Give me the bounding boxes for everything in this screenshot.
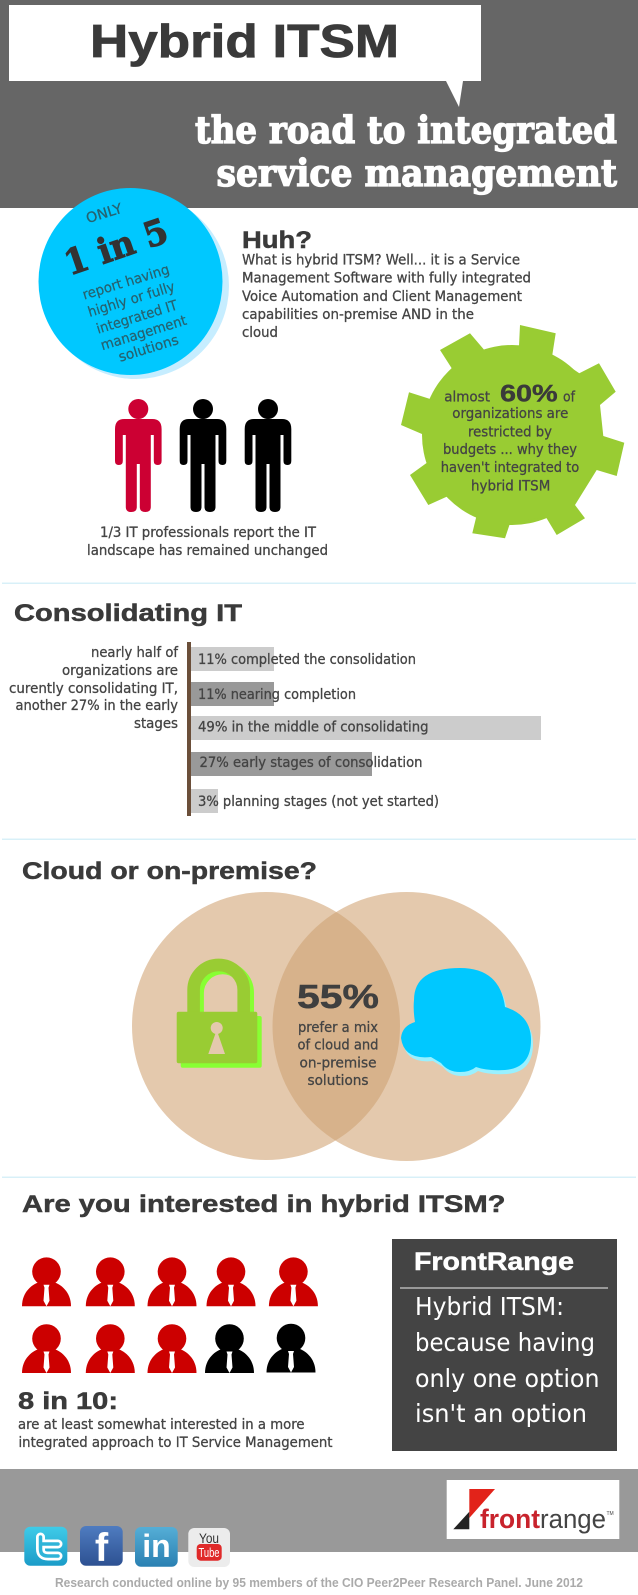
icon: red person — [115, 399, 162, 512]
icon: padlock — [177, 965, 262, 1068]
callout: almost 60%: hybrid ITSM — [471, 479, 550, 495]
1 in 5 text: integrated IT — [95, 298, 180, 338]
icon: red person 4 — [206, 1257, 256, 1306]
callout: 55%: prefer a mix — [298, 1020, 378, 1036]
panel message: only one option — [415, 1364, 600, 1393]
icon grid: 8 in 10 people — [22, 1257, 318, 1373]
caption: 1/3 IT professionals — [87, 525, 328, 559]
text block: what is hybrid ITSM: Management Software with fully integrated — [242, 270, 531, 286]
text block: nearly half: another 27% in the early — [16, 698, 178, 714]
footer band — [0, 1469, 638, 1552]
title speech bubble — [9, 5, 481, 107]
callout: 55% — [297, 978, 379, 1089]
caption: 1/3 IT professionals: 1/3 IT professionals report the IT — [100, 525, 316, 541]
icon: red person 1 — [22, 1257, 71, 1306]
1 in 5 text: report having — [81, 262, 171, 303]
heading: Consolidating IT: Consolidating IT — [14, 600, 242, 627]
panel message: Hybrid ITSM: — [415, 1292, 564, 1321]
1 in 5 text — [59, 201, 189, 366]
1 in 5 text: management — [99, 313, 189, 354]
text block: what is hybrid ITSM: What is hybrid ITSM? Well... it is a Service — [242, 252, 520, 268]
icon: red person 2 — [86, 1257, 135, 1306]
callout: almost 60%: 60% — [500, 381, 558, 408]
icon: black person 10 — [266, 1324, 316, 1372]
text block: 8 in 10 description: are at least somewhat interested in a more — [18, 1417, 304, 1433]
text block: nearly half: organizations are — [62, 663, 178, 679]
text block: what is hybrid ITSM: cloud — [242, 325, 278, 341]
stat: 8 in 10: 8 in 10: — [18, 1388, 118, 1415]
text block: what is hybrid ITSM — [242, 252, 531, 341]
1 in 5 text: solutions — [117, 332, 181, 366]
icon: red person 5 — [269, 1257, 318, 1306]
1 in 5 text: highly or fully — [86, 279, 177, 321]
text block: 8 in 10 description — [18, 1417, 333, 1451]
callout: almost 60%: haven't integrated to — [441, 460, 579, 476]
text block: what is hybrid ITSM: Voice Automation and Client Management — [242, 289, 522, 305]
icon: red person 8 — [148, 1324, 196, 1373]
icon: linkedin — [135, 1527, 178, 1567]
text block: 8 in 10 description: integrated approach to IT Service Management — [18, 1435, 333, 1451]
callout: almost 60%: organizations are — [452, 406, 568, 422]
icon: three people — [115, 399, 291, 512]
callout: 55%: 55% — [297, 978, 379, 1015]
icon: black person — [245, 399, 291, 512]
panel: FrontRange message — [392, 1239, 617, 1451]
icon: facebook: f — [95, 1526, 109, 1570]
callout: almost 60%: budgets ... why they — [443, 442, 577, 458]
subtitle: service management — [216, 151, 617, 195]
callout: 55%: on-premise — [300, 1056, 376, 1072]
icon: black person 9 — [205, 1324, 254, 1373]
icon: youtube: You — [199, 1530, 219, 1546]
bar chart: consolidation stages — [187, 642, 541, 816]
venn diagram — [132, 892, 540, 1161]
text block: what is hybrid ITSM: capabilities on-premise AND in the — [242, 307, 474, 323]
icon: facebook — [80, 1526, 123, 1570]
callout: 55%: solutions — [308, 1073, 368, 1089]
panel heading: FrontRange — [414, 1248, 574, 1276]
icon: red person 7 — [86, 1324, 135, 1373]
text block: nearly half — [9, 645, 179, 732]
logo: frontrange: range — [540, 1504, 606, 1534]
icon: red person 3 — [148, 1257, 196, 1306]
1 in 5 text: 1 in 5 — [59, 211, 173, 284]
subtitle — [195, 108, 617, 195]
bar chart: consolidation stages: 3% planning stages (not yet started) — [198, 794, 439, 810]
bar chart: consolidation stages: 11% completed the consolidation — [198, 652, 416, 668]
bar chart: consolidation stages: 49% in the middle of consolidating — [198, 720, 428, 736]
logo: frontrange — [447, 1480, 619, 1539]
heading: Are you interested: Are you interested in hybrid ITSM? — [22, 1191, 506, 1218]
icon: twitter — [24, 1527, 67, 1566]
icon: youtube — [188, 1528, 230, 1567]
bar chart: consolidation stages: 27% early stages of consolidation — [200, 755, 422, 771]
text block: nearly half: curently consolidating IT, — [9, 681, 178, 697]
icon: youtube: Tube — [198, 1545, 220, 1560]
logo: frontrange: front — [480, 1504, 540, 1534]
panel message: because having — [415, 1328, 595, 1357]
icon: black person — [180, 399, 226, 512]
1 in 5 text: ONLY — [84, 201, 125, 227]
text block: nearly half: stages — [134, 716, 178, 732]
header band — [0, 0, 638, 208]
panel message — [415, 1292, 600, 1428]
callout: 55%: of cloud and — [298, 1038, 378, 1054]
panel message: isn't an option — [415, 1399, 587, 1428]
callout: 1 in 5 circle — [38, 188, 229, 379]
icon: red person 6 — [22, 1324, 71, 1373]
bar chart: consolidation stages: 11% nearing completion — [198, 687, 356, 703]
heading: Huh?: Huh? — [242, 227, 312, 254]
title: Hybrid ITSM — [90, 15, 399, 67]
callout: almost 60% — [441, 381, 579, 495]
callout: almost 60%: of — [563, 390, 576, 406]
icon: green gear — [401, 325, 624, 538]
text block: nearly half: nearly half of — [91, 645, 179, 661]
logo: frontrange: TM — [606, 1511, 614, 1517]
icon: cloud — [401, 968, 533, 1076]
callout: almost 60%: almost — [444, 390, 490, 406]
caption: 1/3 IT professionals: landscape has remained unchanged — [87, 543, 328, 559]
icon: linkedin: in — [142, 1528, 171, 1564]
source note: Research conducted online by 95 members of the CIO Peer2Peer Research Panel. June 2012 — [55, 1576, 583, 1590]
callout: almost 60%: restricted by — [468, 425, 552, 441]
heading: Cloud or on-premise?: Cloud or on-premise? — [22, 858, 317, 885]
